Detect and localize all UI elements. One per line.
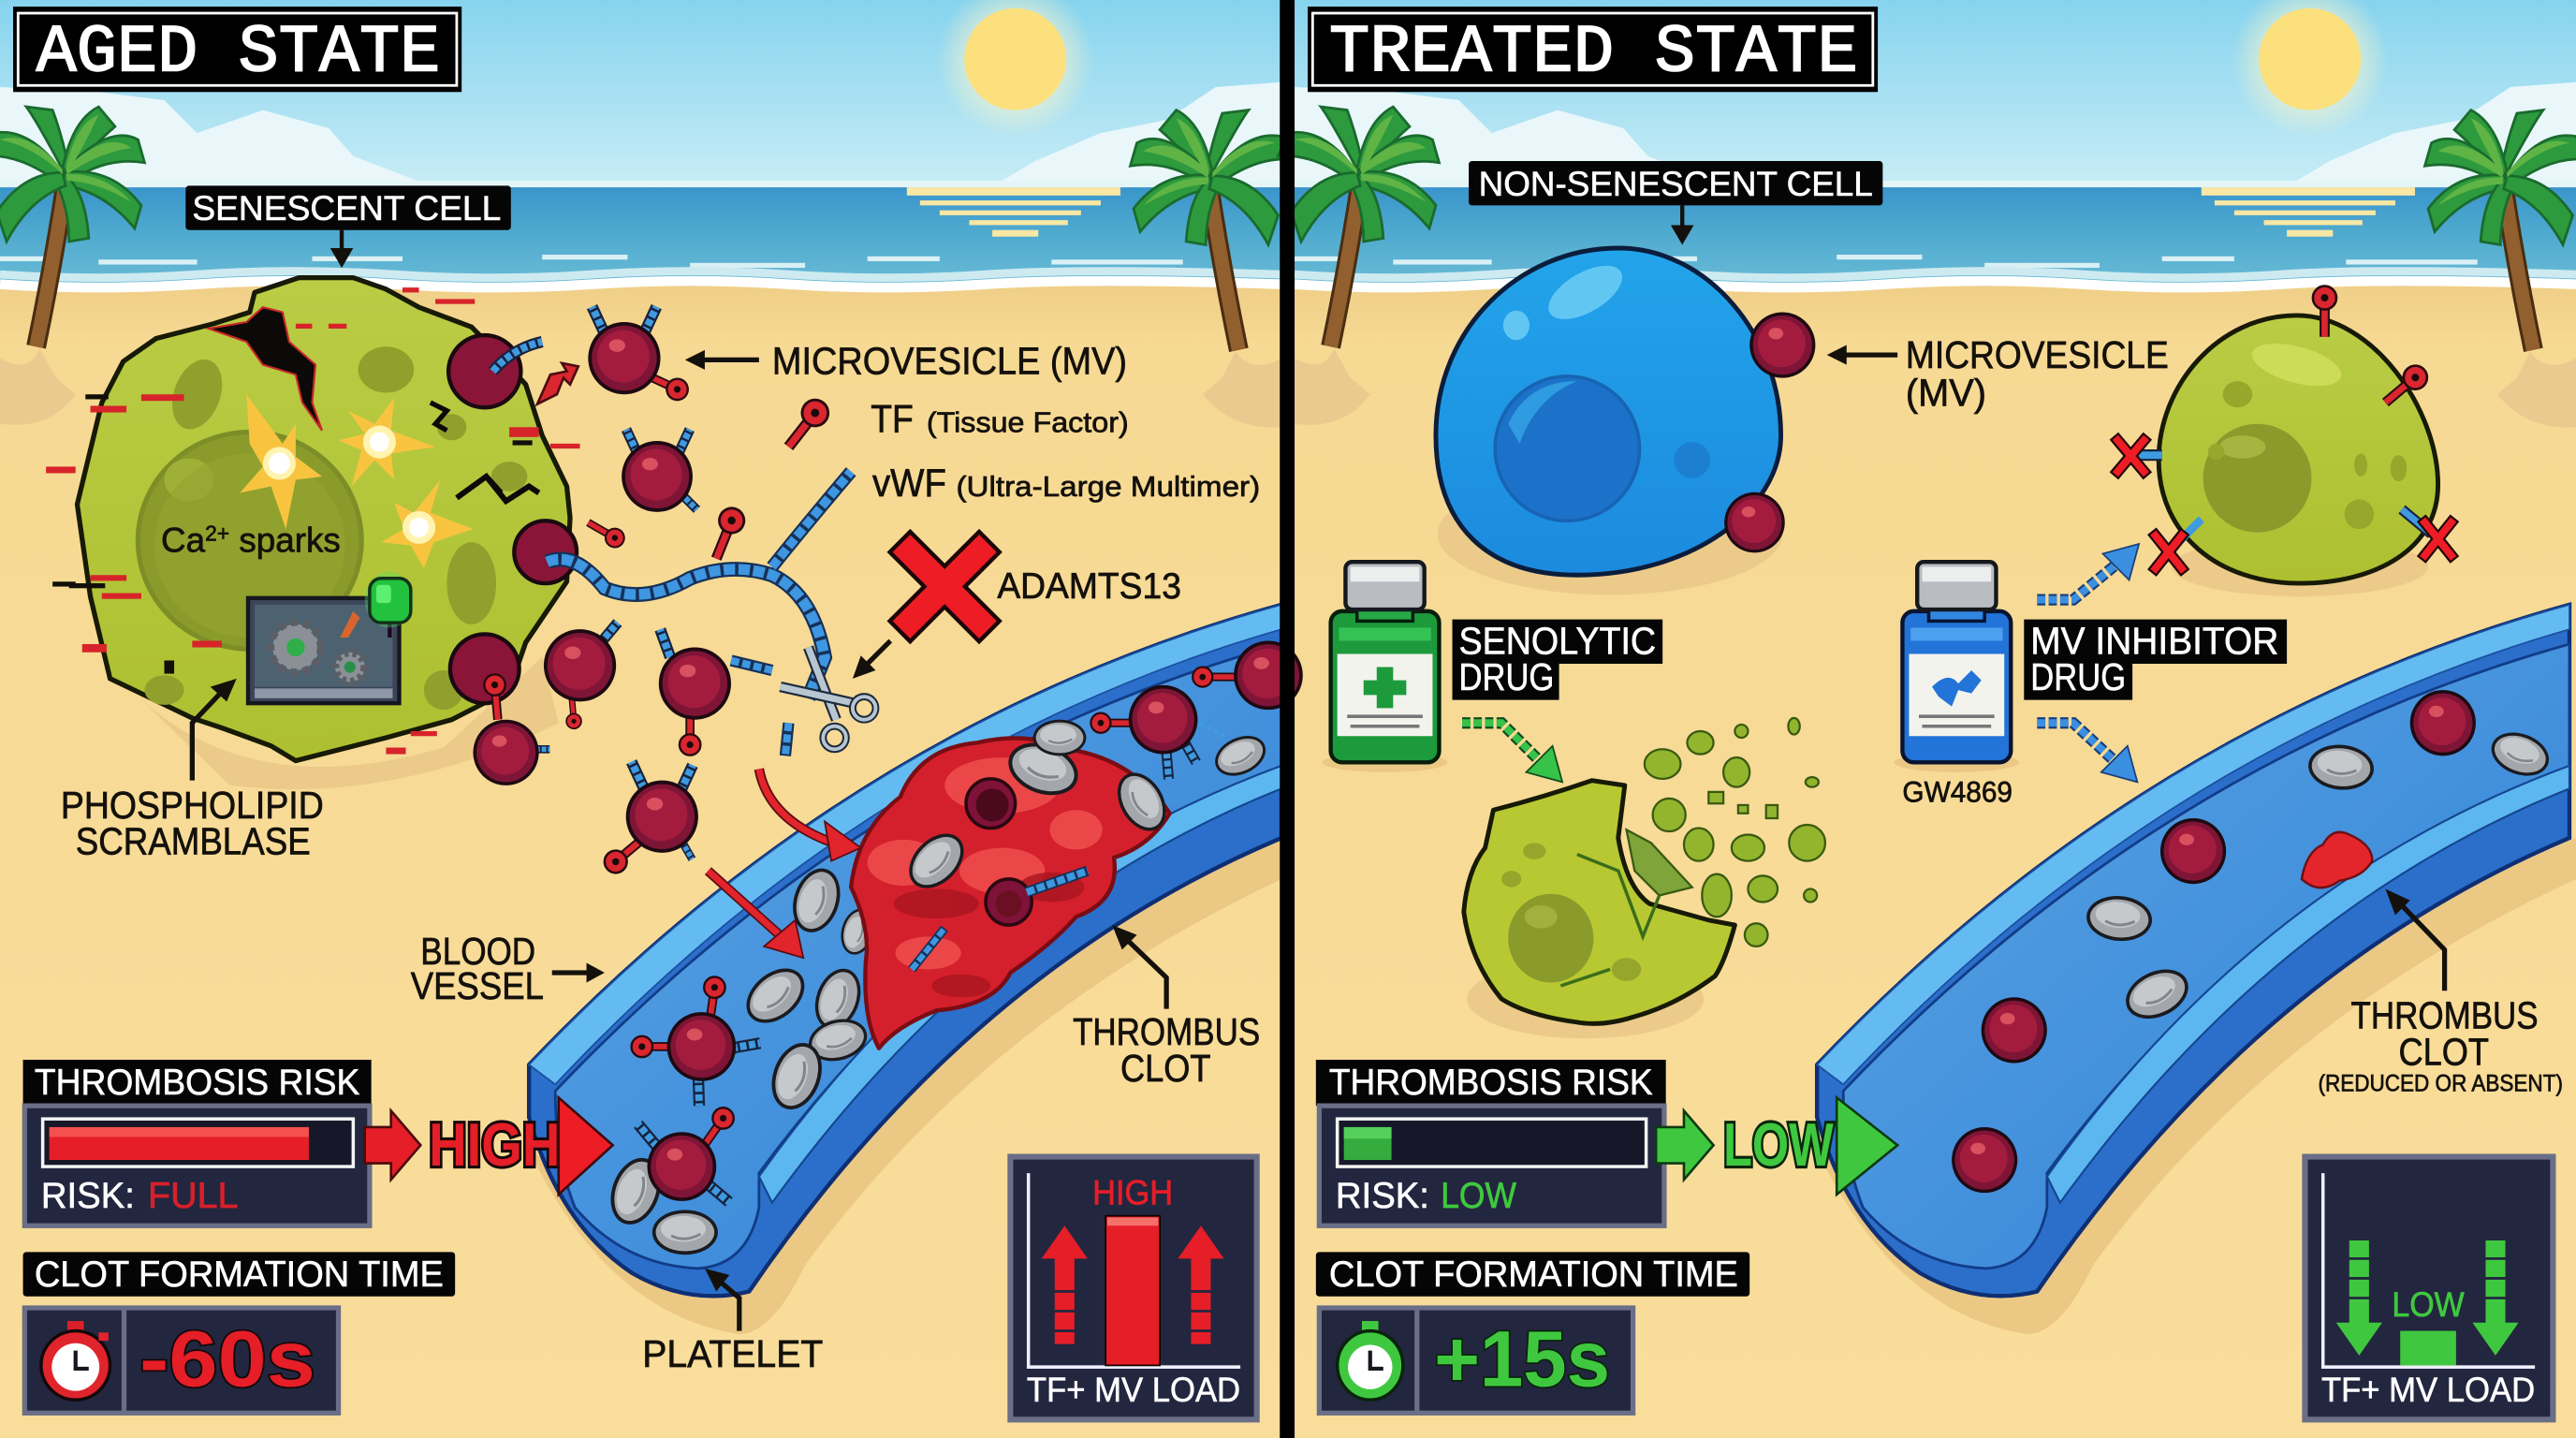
label: thrombus clot: THROMBUS (1073, 1010, 1260, 1053)
clot formation time: -60s (139, 1314, 315, 1402)
TF+ MV load chart (1010, 1157, 1257, 1419)
membrane glitch fragments (46, 287, 580, 755)
legend: tissue factor: (Tissue Factor) (927, 406, 1129, 439)
arrow and high risk label: HIGH (429, 1110, 560, 1179)
label: microvesicle: MICROVESICLE (MV) (772, 339, 1127, 382)
platelets and vesicles in vessel (602, 640, 1303, 1255)
label: microvesicle: MICROVESICLE (1906, 333, 2169, 376)
thrombosis risk gauge: THROMBOSIS RISK (35, 1063, 360, 1103)
non-senescent blue cell (1436, 248, 1781, 575)
title: treated state: TREATED STATE (1329, 14, 1858, 91)
thrombosis risk gauge: RISK: (1336, 1176, 1429, 1216)
thrombosis risk gauge (23, 1060, 372, 1225)
legend: vWF: (Ultra-Large Multimer) (956, 470, 1260, 503)
TF+ MV load chart: HIGH (1092, 1173, 1173, 1211)
arrow and high risk label (365, 1097, 613, 1195)
label: non-senescent cell: NON-SENESCENT CELL (1479, 165, 1873, 203)
title: aged state: AGED STATE (37, 14, 440, 91)
panel: treated state (1308, 7, 2576, 1419)
arrow: load rising (1042, 1225, 1224, 1344)
label: senolytic drug (1453, 620, 1662, 700)
label: thrombus clot (1073, 925, 1260, 1090)
label: thrombus clot reduced: THROMBUS (2351, 994, 2539, 1037)
arrow: senolytic to cell (1462, 723, 1562, 782)
label: thrombus clot: CLOT (1120, 1047, 1211, 1090)
label: calcium sparks: Ca (161, 521, 205, 560)
label: platelet (642, 1269, 823, 1375)
label: MV inhibitor drug (2024, 620, 2287, 700)
arrow: load falling (2336, 1240, 2519, 1356)
thrombosis risk gauge: LOW (1441, 1176, 1516, 1216)
icon: green stopwatch (1338, 1321, 1403, 1400)
TF+ MV load chart: TF+ MV LOAD (2321, 1371, 2535, 1409)
arrow: inhibitor to lime cell (2037, 544, 2139, 600)
surface tissue factor and blocked sticks (2130, 286, 2432, 552)
icon: MV inhibitor drug bottle (1895, 562, 2019, 772)
arrow: ADAMTS13 to scissors (853, 640, 890, 679)
arrows: flow into clot (708, 769, 861, 958)
fragments (1627, 718, 1825, 946)
clot formation time (1316, 1252, 1749, 1413)
arrow: budding direction (537, 363, 578, 404)
arrow and low risk label (1656, 1097, 1897, 1195)
phospholipid scramblase device (248, 598, 399, 703)
panel: aged state (13, 7, 1303, 1419)
vesicles and platelets in vessel (1952, 690, 2555, 1193)
nucleus (138, 433, 361, 649)
blue cell shadow (1438, 473, 1782, 594)
senescent cell (46, 278, 580, 761)
background: aged panel beach (0, 0, 1292, 1438)
label: microvesicle (1827, 333, 2169, 414)
von Willebrand factor chain (547, 472, 851, 756)
ADAMTS13 absent marker: ADAMTS13 (997, 566, 1181, 607)
thrombus clot (851, 720, 1176, 1049)
icon: scissors (781, 647, 875, 749)
label: senolytic drug: SENOLYTIC (1459, 620, 1656, 663)
legend: tissue factor (779, 395, 1129, 455)
legend: tissue factor: TF (871, 397, 914, 441)
inhibited lime cell shadow (2172, 537, 2428, 596)
label: MV inhibitor drug: DRUG (2030, 655, 2126, 698)
label: MV inhibitor drug: MV INHIBITOR (2030, 620, 2278, 663)
blocked markers (2117, 440, 2452, 568)
blood vessel shadow (1817, 838, 2576, 1334)
label: platelet: PLATELET (642, 1332, 823, 1375)
crack (209, 307, 539, 501)
label: thrombus clot reduced (2318, 888, 2563, 1096)
icon: red stopwatch (41, 1321, 110, 1400)
clot formation time: +15s (1434, 1314, 1610, 1402)
TF+ MV load chart: LOW (2392, 1285, 2465, 1324)
label: phospholipid scramblase (61, 679, 324, 863)
label: senescent cell: SENESCENT CELL (192, 189, 501, 227)
thrombosis risk gauge: FULL (148, 1176, 238, 1216)
label: phospholipid scramblase: PHOSPHOLIPID (61, 784, 324, 827)
label: senescent cell (185, 185, 511, 268)
label: non-senescent cell (1469, 161, 1882, 244)
panel divider (1280, 0, 1295, 1438)
blood vessel (1817, 605, 2569, 1296)
label: blood vessel (411, 930, 605, 1007)
ADAMTS13 absent marker (910, 552, 1181, 621)
blood vessel (529, 605, 1281, 1296)
inhibited lime cell (2159, 315, 2438, 583)
clot formation time: CLOT FORMATION TIME (35, 1255, 444, 1295)
arrow and low risk label: LOW (1723, 1110, 1834, 1179)
label: blood vessel: BLOOD (420, 930, 535, 973)
sparks (240, 394, 473, 568)
cell spots (144, 346, 527, 710)
microvesicles on blue cell (1724, 312, 1815, 552)
fragmenting senescent cell (1464, 718, 1825, 1038)
thrombosis risk gauge: RISK: (41, 1176, 135, 1216)
label: GW4869: GW4869 (1902, 774, 2012, 808)
label: blood vessel: VESSEL (411, 964, 544, 1007)
budding microvesicles on the membrane (448, 335, 577, 703)
TF+ MV load chart (2305, 1157, 2553, 1419)
label: phospholipid scramblase: SCRAMBLASE (76, 820, 311, 863)
scattered microvesicles (473, 307, 748, 877)
background: treated panel beach (1278, 0, 2576, 1438)
label: microvesicle: (MV) (1906, 371, 1986, 414)
label: calcium sparks: sparks (229, 521, 341, 560)
icon: senolytic drug bottle (1323, 562, 1447, 772)
label: senolytic drug: DRUG (1459, 655, 1554, 698)
clot formation time (23, 1252, 455, 1413)
label: calcium sparks: 2+ (205, 521, 229, 545)
legend: vWF (872, 461, 1260, 505)
reduced clot (2302, 832, 2372, 888)
thrombosis risk gauge: THROMBOSIS RISK (1329, 1063, 1653, 1103)
indicator light (365, 572, 414, 638)
arrow: inhibitor to vessel (2037, 723, 2137, 782)
senescent cell shadow (131, 657, 559, 789)
thrombosis risk gauge (1316, 1060, 1666, 1225)
legend: vWF: vWF (872, 461, 946, 505)
TF+ MV load chart: TF+ MV LOAD (1027, 1371, 1240, 1409)
blood vessel shadow (529, 838, 1281, 1334)
clot formation time: CLOT FORMATION TIME (1329, 1255, 1738, 1295)
label: thrombus clot reduced: CLOT (2398, 1030, 2489, 1073)
